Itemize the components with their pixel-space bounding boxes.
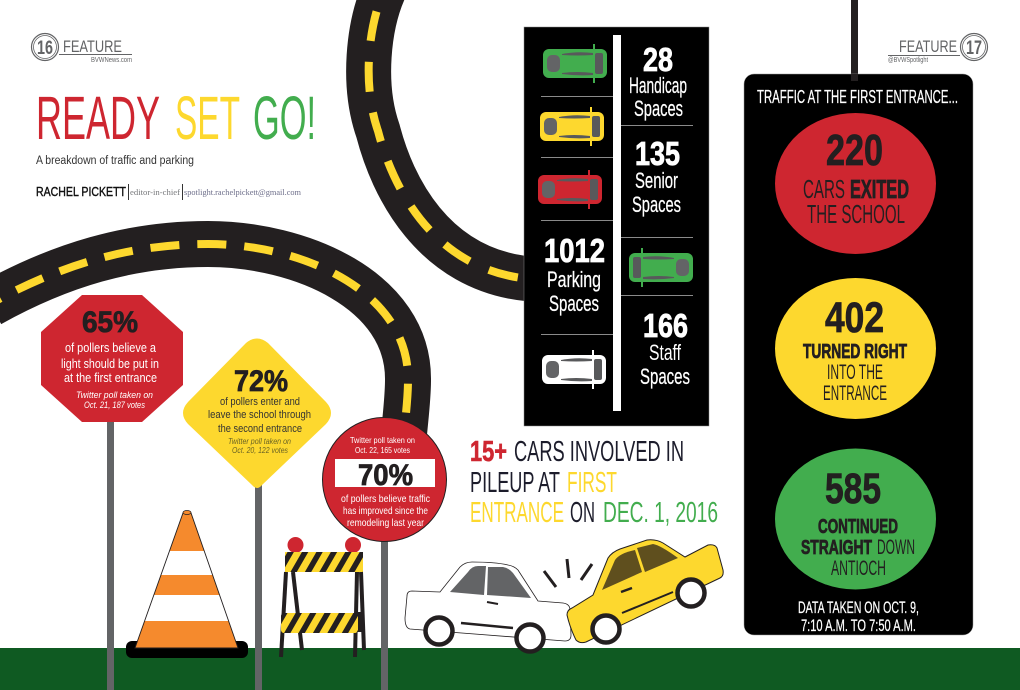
stat: senior spaces: Spaces (632, 192, 681, 217)
stat: handicap spaces (629, 41, 687, 121)
page header right: @BVWSpotlight (888, 57, 928, 64)
byline (36, 184, 301, 200)
traffic light pole (851, 0, 858, 81)
lower road (0, 244, 408, 445)
yellow light: 402 (775, 278, 936, 419)
crash headline: 15+ (470, 436, 507, 468)
crash headline: ENTRANCE (470, 497, 564, 529)
pole: round sign (381, 538, 388, 690)
round sign: 70%: Oct. 22, 165 votes (355, 445, 410, 455)
yellow light: 402: TURNED RIGHT (803, 341, 907, 363)
round sign: 70%: Twitter poll taken on (350, 435, 415, 445)
page header right: FEATURE (899, 37, 957, 56)
diamond sign: 72% (183, 338, 331, 488)
icon: red car (538, 170, 602, 209)
title: GO! (253, 84, 316, 152)
icon: yellow car (540, 107, 604, 146)
diamond sign: 72%: leave the school through (208, 409, 311, 421)
pole: diamond sign (255, 485, 262, 690)
stat: senior spaces: 135 (635, 135, 680, 172)
stat: handicap spaces: Handicap (629, 73, 687, 98)
green light: 585: CONTINUED (818, 516, 898, 538)
byline: RACHEL PICKETT (36, 184, 126, 199)
icon: green car (543, 44, 607, 83)
round sign: 70% (322, 418, 446, 542)
stat: staff spaces: Spaces (640, 364, 690, 389)
green light: 585: DOWN (877, 536, 915, 559)
panel: parking (524, 27, 709, 426)
diamond sign: 72%: of pollers enter and (220, 396, 300, 408)
yellow light: 402: ENTRANCE (823, 382, 887, 405)
stat: parking spaces: 1012 (544, 232, 605, 269)
red light: 220: CARS (803, 174, 845, 204)
stat: parking spaces: Spaces (549, 291, 599, 316)
subtitle: A breakdown of traffic and parking (36, 155, 194, 167)
page header left (32, 34, 132, 64)
data note (798, 598, 919, 635)
stat: handicap spaces: 28 (643, 41, 673, 78)
byline: spotlight.rachelpickett@gmail.com (184, 187, 301, 197)
diamond sign: 72%: Oct. 20, 122 votes (232, 445, 289, 455)
title: SET (175, 84, 240, 152)
stat: handicap spaces: Spaces (634, 96, 683, 121)
page header left: BVWNews.com (91, 57, 132, 64)
icon: white car (542, 350, 606, 389)
icon: traffic cone (126, 510, 248, 658)
page header right (888, 34, 988, 64)
green light: 585: STRAIGHT (801, 537, 872, 559)
red light: 220: EXITED (850, 174, 909, 204)
stat: senior spaces: Senior (635, 168, 678, 193)
crash headline: PILEUP AT (470, 467, 560, 499)
crash headline: CARS INVOLVED IN (514, 436, 684, 468)
data note: DATA TAKEN ON OCT. 9, (798, 598, 919, 617)
green light: 585: ANTIOCH (831, 557, 886, 580)
stat: staff spaces: Staff (649, 340, 682, 365)
stat: parking spaces (544, 232, 605, 316)
round sign: 70%: has improved since the (343, 505, 428, 517)
red light: 220: THE SCHOOL (807, 199, 905, 229)
stop sign: 65%: of pollers believe a (65, 341, 156, 355)
impact lines (544, 559, 592, 587)
data note: 7:10 A.M. TO 7:50 A.M. (801, 616, 916, 635)
green light: 585 (775, 448, 936, 590)
crash headline (470, 436, 718, 529)
stop sign: 65%: at the first entrance (64, 371, 157, 385)
stat: parking spaces: Parking (547, 267, 601, 292)
stat: staff spaces (640, 307, 690, 389)
yellow car (567, 540, 723, 643)
icon: green car facing left (629, 248, 693, 287)
stop sign: 65% (41, 295, 183, 422)
page header left: FEATURE (63, 37, 122, 56)
green light: 585: 585 (825, 465, 881, 513)
crash headline: DEC. 1, 2016 (603, 497, 718, 529)
crash headline: FIRST (567, 467, 617, 499)
diamond sign: 72%: the second entrance (218, 423, 302, 435)
stop sign: 65%: 65% (82, 306, 138, 339)
stat: staff spaces: 166 (643, 307, 688, 344)
red light: 220: 220 (826, 126, 883, 175)
page header left: 16 (37, 38, 53, 59)
yellow light: 402: 402 (825, 294, 884, 342)
diamond sign: 72%: Twitter poll taken on (228, 436, 291, 446)
diamond sign: 72%: 72% (234, 365, 288, 398)
page header right: 17 (966, 38, 982, 59)
white car (405, 562, 571, 652)
icon: car crash (405, 540, 723, 652)
stop sign: 65%: Twitter poll taken on (76, 390, 153, 401)
grass strip (0, 648, 1020, 690)
round sign: 70%: of pollers believe traffic (341, 493, 430, 505)
icon: road barricade (281, 537, 364, 657)
red light: 220 (775, 113, 936, 254)
round sign: 70%: remodeling last year (347, 517, 424, 529)
pole: stop sign (107, 420, 114, 690)
title: READY (36, 84, 160, 152)
stat: senior spaces (632, 135, 681, 217)
yellow light: 402: INTO THE (827, 361, 883, 384)
crash headline: ON (570, 497, 595, 529)
upper road (369, 0, 530, 279)
round sign: 70%: 70% (358, 459, 413, 492)
panel: traffic light (744, 74, 973, 635)
stop sign: 65%: Oct. 21, 187 votes (84, 400, 145, 411)
stop sign: 65%: light should be put in (61, 357, 159, 371)
byline: editor-in-chief (130, 187, 180, 197)
